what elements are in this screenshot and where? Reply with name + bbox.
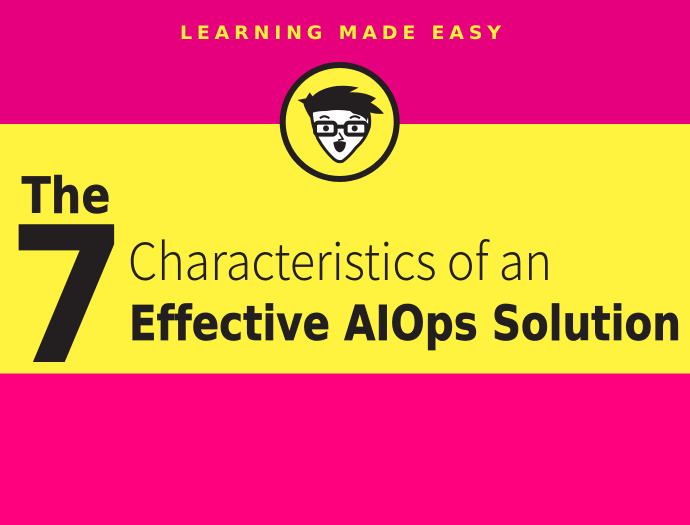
icon: cartoon face logo bbox=[283, 65, 397, 179]
heading: The: The bbox=[22, 167, 110, 225]
heading: numeral 7: 7 bbox=[7, 186, 128, 407]
heading: Characteristics of an: Characteristics of an bbox=[128, 221, 552, 295]
icon: hair bbox=[297, 86, 384, 122]
tagline: LEARNING MADE EASY bbox=[180, 22, 501, 44]
top magenta band bbox=[0, 0, 690, 124]
icon: eyebrows bbox=[320, 116, 360, 118]
icon: mouth bbox=[333, 141, 346, 152]
icon: nose bbox=[338, 133, 343, 140]
yellow title band bbox=[0, 124, 690, 374]
icon: glasses bbox=[315, 123, 366, 135]
bottom pink band bbox=[0, 374, 690, 525]
icon: pupils bbox=[323, 125, 329, 131]
icon: face bbox=[311, 108, 370, 162]
